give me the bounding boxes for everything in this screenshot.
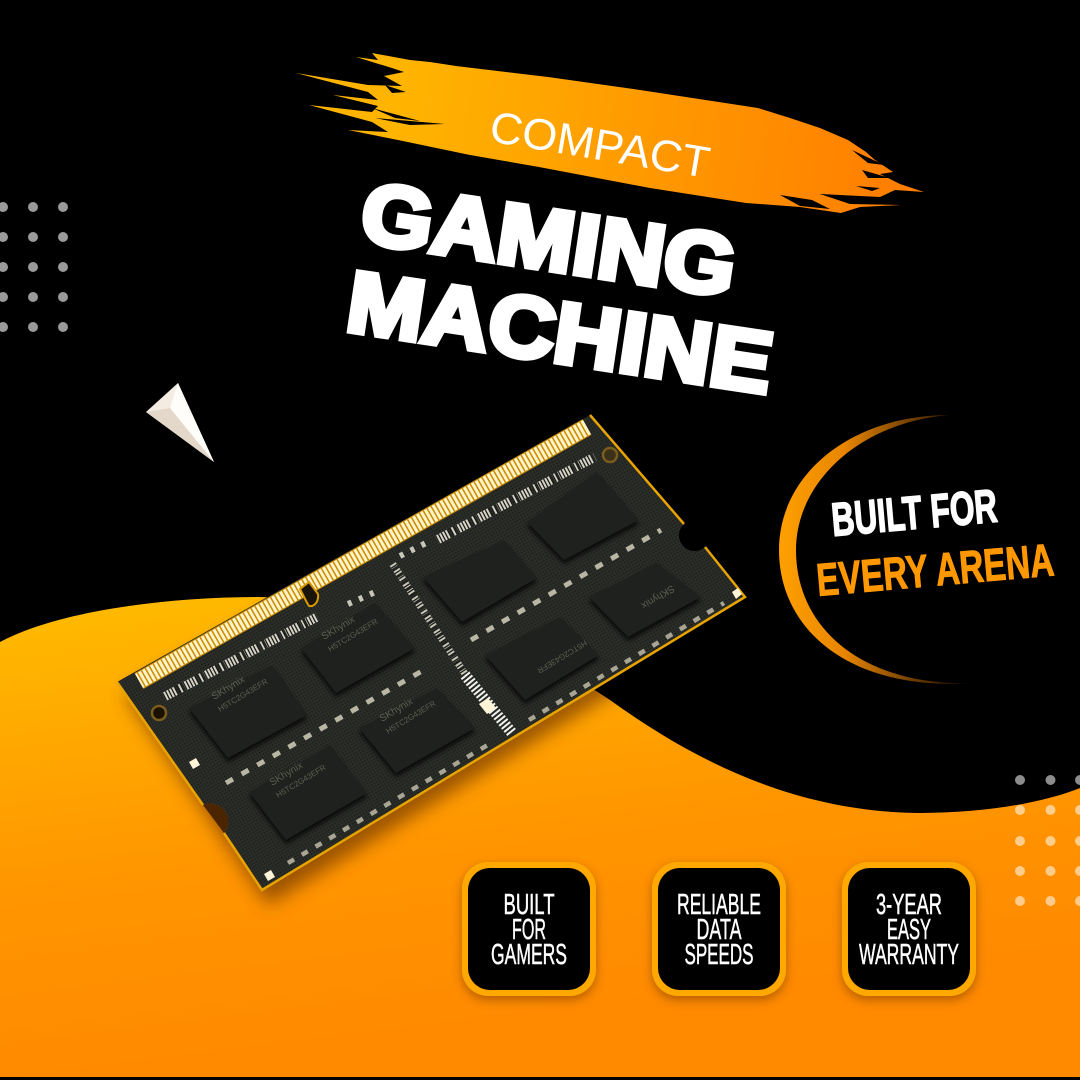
feature badge: built for gamers: BUILT — [504, 889, 555, 921]
chip markings: SKhynix — [268, 760, 305, 789]
feature badge: reliable data speeds — [652, 862, 786, 1000]
gold edges — [117, 415, 745, 890]
dot grid: left — [0, 202, 68, 332]
RAM shadow — [118, 689, 616, 912]
left notch shade — [203, 804, 228, 833]
title: GAMING MACHINE — [341, 165, 779, 412]
gold connector fingers — [139, 427, 587, 681]
memory chips — [189, 472, 701, 844]
feature badge: built for gamers — [462, 862, 596, 1000]
feature badge: 3-year easy warranty: 3-YEAR — [876, 889, 942, 921]
chip markings: SKhynix — [210, 674, 247, 703]
feature badge: reliable data speeds: SPEEDS — [684, 939, 754, 971]
title: GAMING MACHINE: GAMING — [355, 165, 742, 316]
surface mount components — [164, 457, 724, 863]
feature badge: 3-year easy warranty: WARRANTY — [859, 939, 959, 971]
callout: built for every arena: BUILT FOR — [829, 479, 999, 546]
chip markings: SKhynix — [378, 696, 415, 725]
chip markings: H5TC2G43EFR — [216, 677, 270, 714]
icon: 3D triangle arrow — [146, 383, 214, 462]
paint brush stroke — [296, 53, 924, 213]
chip markings — [210, 582, 676, 800]
callout: built for every arena — [814, 479, 1056, 606]
label: COMPACT: COMPACT — [486, 103, 713, 188]
PCB board — [117, 415, 745, 890]
feature badge: built for gamers: FOR — [512, 914, 546, 946]
dot grid: right — [1015, 775, 1080, 906]
chip markings: H5TC2G43EFR — [326, 617, 380, 654]
feature badge: 3-year easy warranty — [842, 862, 976, 1000]
crescent — [779, 415, 975, 684]
chip markings: SKhynix — [639, 582, 676, 611]
feature badge: reliable data speeds: RELIABLE — [677, 889, 761, 921]
feature badge: 3-year easy warranty: EASY — [887, 914, 931, 946]
chip markings: SKhynix — [320, 614, 357, 643]
chip markings: H5TC2G43EFR — [384, 699, 438, 736]
orange wave — [0, 597, 1080, 1077]
white pads — [189, 588, 742, 881]
chip markings: H5TC2G43EFR — [535, 638, 589, 675]
feature badge: built for gamers: GAMERS — [491, 939, 567, 971]
RAM module — [117, 415, 745, 890]
chip markings: H5TC2G43EFR — [274, 763, 328, 800]
feature badge: reliable data speeds: DATA — [696, 914, 742, 946]
title: GAMING MACHINE: MACHINE — [341, 254, 779, 412]
connector notch — [300, 582, 318, 606]
mounting holes — [152, 448, 617, 720]
